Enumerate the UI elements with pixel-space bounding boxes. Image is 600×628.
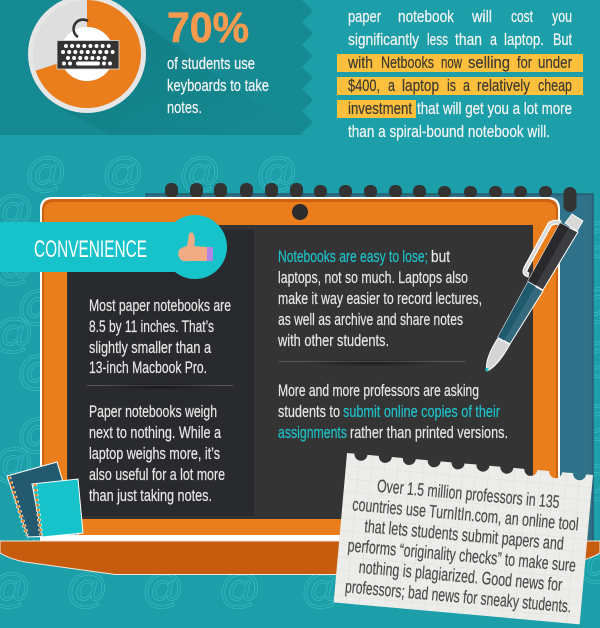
text block: cost comparison: laptop.: [504, 31, 544, 49]
text block: cost comparison: laptop: [402, 77, 439, 95]
text block: paper notebook size: 8.5 by 11 inches. That’s: [89, 318, 214, 336]
text block: cost comparison: than: [455, 31, 482, 49]
stat caption: notes.: [167, 99, 202, 117]
text block: online submission: assignments: [278, 424, 347, 442]
text block: paper notebook size: slightly smaller than a: [89, 339, 212, 357]
text block: cost comparison: relatively: [477, 77, 531, 95]
text block: notebooks easy to lose: make it way easier to record lectures,: [278, 290, 482, 308]
text block: cost comparison: is: [447, 77, 456, 95]
infographic: @: [69, 187, 111, 234]
text block: online submission: [278, 382, 508, 442]
text block: cost comparison: for: [517, 54, 532, 72]
infographic: @: [99, 517, 141, 564]
infographic: @: [146, 187, 188, 234]
screen: [67, 225, 533, 519]
text block: paper notebook weight: than just taking notes.: [89, 487, 212, 505]
infographic: @: [25, 149, 67, 196]
text block: cost comparison: But: [553, 31, 572, 49]
text block: cost comparison: you: [552, 8, 572, 26]
infographic: @: [249, 517, 291, 564]
cyan notebook: [32, 479, 83, 537]
text block: cost comparison: [337, 8, 583, 141]
stat: 70%: 70%: [167, 4, 249, 52]
text block: cost comparison: less: [427, 31, 448, 49]
text block: online submission: submit online copies of their: [343, 403, 500, 421]
text block: cost comparison: than a spiral-bound notebook will.: [348, 123, 550, 141]
laptop screen frame: [40, 197, 560, 541]
text block: cost comparison: a: [388, 77, 396, 95]
infographic: @: [17, 282, 59, 329]
text block: paper notebook size: Most paper notebooks are: [89, 297, 231, 315]
donut chart: 70 percent: [28, 0, 146, 113]
text block: cost comparison: a: [490, 31, 498, 49]
text block: cost comparison: cost: [511, 8, 533, 26]
infographic: @: [17, 347, 59, 394]
callout: torn paper note: [334, 453, 593, 624]
text block: cost comparison: selling: [468, 54, 510, 72]
icon: notebooks: [7, 462, 83, 537]
text block: cost comparison: investment: [348, 100, 412, 118]
text block: cost comparison: significantly: [348, 31, 420, 49]
text block: notebooks easy to lose: Notebooks are easy to lose;: [278, 248, 428, 266]
dark notebook: [7, 462, 78, 537]
infographic: @: [535, 187, 577, 234]
infographic: @: [22, 517, 64, 564]
text block: paper notebook weight: [89, 403, 225, 505]
banner: convenience: [0, 215, 227, 279]
infographic: @: [176, 517, 218, 564]
text block: cost comparison: paper: [348, 8, 381, 26]
webcam: [292, 204, 308, 220]
text block: online submission: students to: [278, 403, 340, 421]
infographic: @: [499, 517, 541, 564]
text block: paper notebook weight: also useful for a lot more: [89, 466, 225, 484]
infographic: @: [102, 149, 144, 196]
infographic: @: [223, 187, 265, 234]
icon: pen: [485, 214, 583, 371]
text block: cost comparison: under: [538, 54, 572, 72]
infographic: @: [142, 565, 184, 612]
stat caption: keyboards to take: [167, 77, 269, 95]
text block: paper notebook weight: Paper notebooks weigh: [89, 403, 217, 421]
notebook rings: [165, 183, 552, 198]
notebook behind laptop: [146, 194, 593, 544]
infographic: @: [219, 565, 261, 612]
infographic: @: [17, 217, 59, 264]
infographic: @: [301, 565, 343, 612]
text block: cost comparison: now: [441, 54, 462, 72]
infographic: @: [256, 149, 298, 196]
stat caption: of students use: [167, 55, 255, 73]
text block: cost comparison: with: [347, 54, 373, 72]
text block: paper notebook size: [89, 297, 231, 377]
text block: online submission: rather than printed versions.: [350, 424, 508, 442]
text block: notebooks easy to lose: with other students.: [277, 332, 389, 350]
text block: paper notebook weight: laptop weighs more, it’s: [89, 445, 220, 463]
text block: online submission: More and more professors are asking: [278, 382, 479, 400]
text block: cost comparison: cheap: [538, 77, 572, 95]
text block: cost comparison: will: [471, 8, 492, 26]
text block: cost comparison: a: [463, 77, 471, 95]
infographic: @: [179, 149, 221, 196]
text block: cost comparison: Netbooks: [381, 54, 434, 72]
text block: paper notebook size: 13-inch Macbook Pro.: [89, 359, 207, 377]
laptop base: [0, 541, 600, 574]
text block: cost comparison: $400,: [348, 77, 380, 95]
infographic: @: [456, 187, 498, 234]
infographic: @: [377, 187, 419, 234]
icon: keyboard: [57, 20, 119, 69]
infographic: @: [309, 187, 351, 234]
icon: thumbs up: [178, 232, 213, 261]
stat caption: [167, 55, 269, 117]
infographic: @: [17, 410, 59, 457]
text block: notebooks easy to lose: [277, 248, 482, 350]
text block: notebooks easy to lose: as well as archive and share notes: [278, 311, 463, 329]
large notebook ring: [564, 187, 576, 212]
heading: CONVENIENCE: [34, 236, 147, 263]
text block: notebooks easy to lose: but: [431, 248, 450, 266]
infographic: @: [66, 565, 108, 612]
text block: cost comparison: notebook: [398, 8, 455, 26]
text block: paper notebook weight: next to nothing. While a: [89, 424, 222, 442]
text block: notebooks easy to lose: laptops, not so much. Laptops also: [278, 269, 468, 287]
panel: keyboard statistic band: [0, 0, 313, 135]
